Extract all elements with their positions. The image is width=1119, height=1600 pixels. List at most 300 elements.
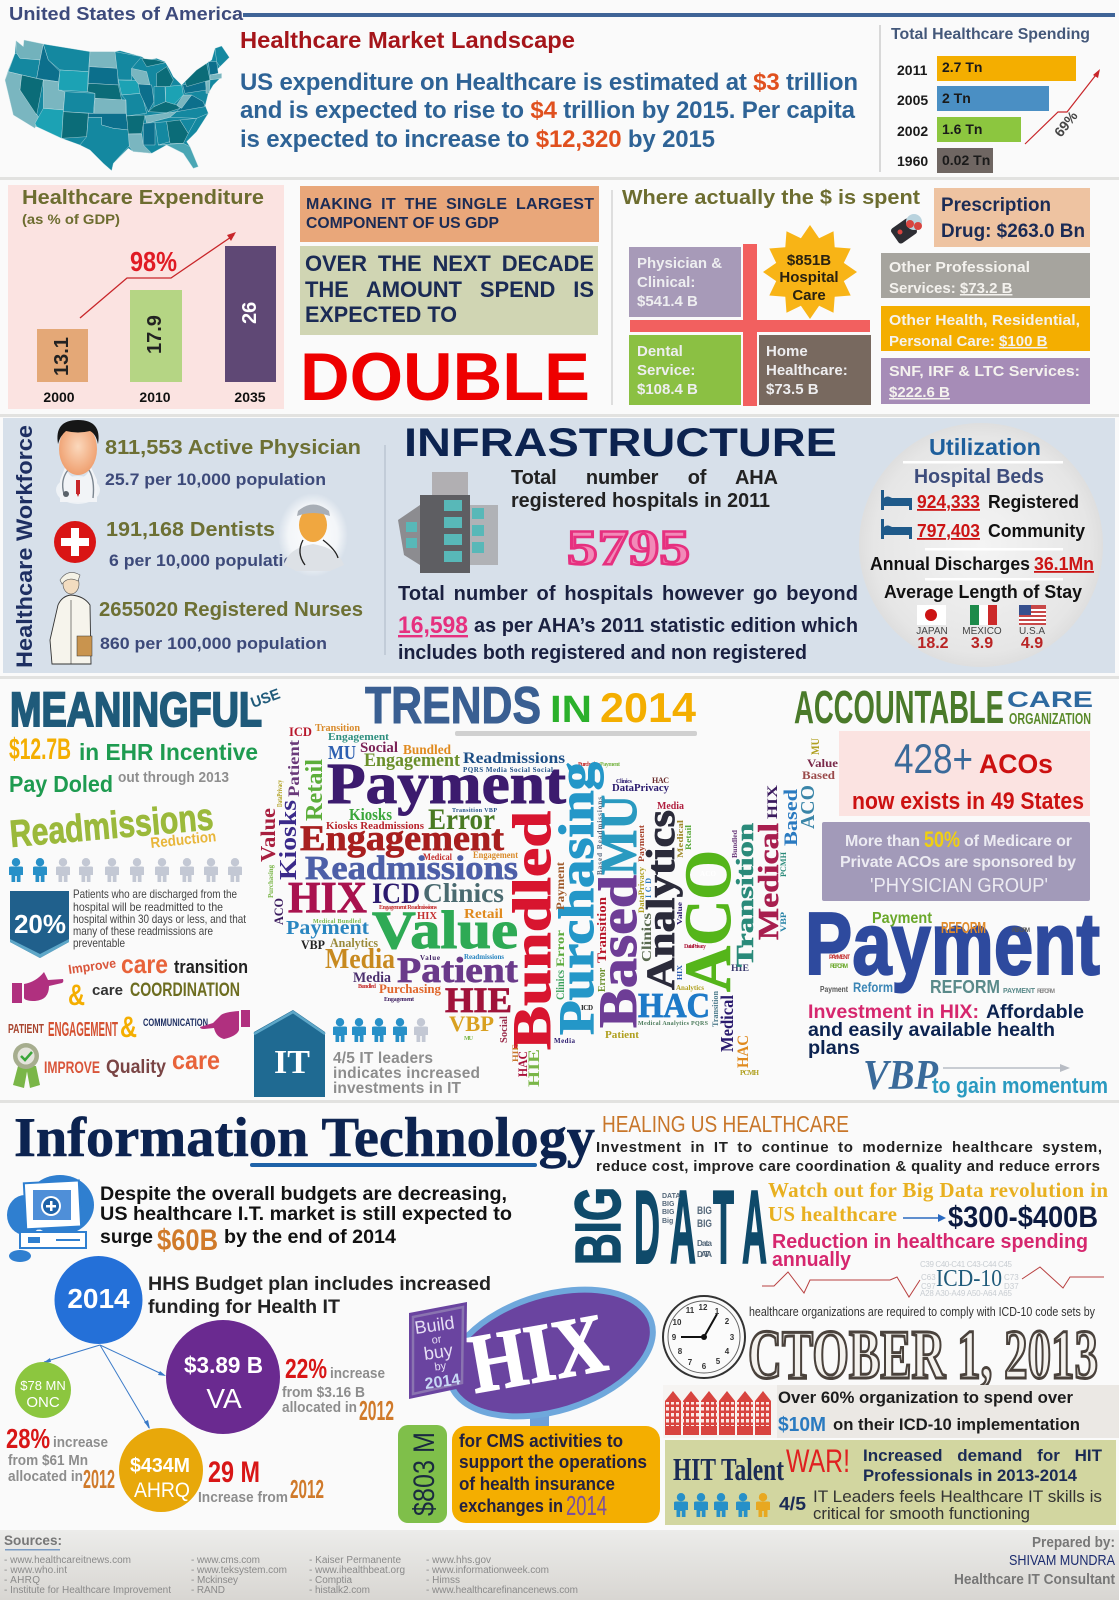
icon: IT house: IT xyxy=(274,1044,310,1081)
panel: CMS activities: of health insurance xyxy=(459,1474,615,1494)
footer: sources and author: - histalk2.com xyxy=(309,1585,370,1596)
word art: payment reform: PAYMENT xyxy=(829,955,850,961)
map of USA xyxy=(5,40,229,171)
footer: sources and author xyxy=(0,1530,1119,1600)
icon: clock: 11 xyxy=(686,1306,695,1315)
word cloud map: Kiosks xyxy=(276,800,302,880)
infrastructure block: registered hospitals in 2011 xyxy=(511,490,770,512)
HIX sign: HIX xyxy=(462,1296,613,1412)
callout: VA increase xyxy=(282,1353,394,1426)
utilization circle: MEXICO xyxy=(962,626,1002,637)
icon: clock xyxy=(663,1296,745,1378)
footer: sources and author: Prepared by: xyxy=(1032,1535,1115,1551)
panel: where the money is spent: Where actually the $ is spent xyxy=(622,187,920,209)
panel: healthcare expenditure: 2010 xyxy=(139,389,171,405)
word cloud map: PCMH xyxy=(740,1069,760,1077)
word cloud map: HIE xyxy=(731,963,749,973)
word cloud map xyxy=(256,723,839,1087)
accountable care organization column xyxy=(794,681,1108,1099)
IT market text: surge xyxy=(100,1226,153,1248)
total healthcare spending bar chart: 2005 xyxy=(897,92,928,108)
investment in HIX text xyxy=(808,1001,1084,1059)
care transition text: Improve xyxy=(67,955,117,977)
panel: where the money is spent: $851B xyxy=(787,252,831,269)
icon: beds xyxy=(881,490,912,539)
word cloud map: HIX xyxy=(676,965,684,980)
HHS budget diagram xyxy=(6,1256,491,1512)
word cloud map: Analytics xyxy=(638,810,683,990)
footer: sources and author: - Comptia xyxy=(309,1575,352,1586)
footer: sources and author: - Himss xyxy=(426,1575,460,1586)
HHS budget diagram: HHS Budget plan includes increased xyxy=(148,1273,491,1295)
footer: sources and author: - Kaiser Permanente xyxy=(309,1555,401,1566)
word art: payment reform: Reform xyxy=(853,979,893,995)
infrastructure block: includes both registered and non registered xyxy=(398,642,807,664)
readmission description: preventable xyxy=(73,936,125,950)
word cloud map: Media xyxy=(325,944,395,975)
word cloud map: Transition xyxy=(733,823,759,967)
panel: where the money is spent: Prescription xyxy=(941,195,1051,216)
footer: sources and author: - www.healthcarefinancenews.com xyxy=(426,1585,578,1596)
sign: build or buy: Build xyxy=(413,1313,456,1338)
care transition text: ENGAGEMENT xyxy=(48,1019,118,1041)
callout: VA increase: 22% xyxy=(285,1353,327,1384)
infrastructure block: as per AHA’s 2011 statistic edition which xyxy=(474,615,858,637)
word cloud map: Purchasing xyxy=(379,981,441,996)
panel: physician group xyxy=(822,822,1090,901)
icon: clock: 7 xyxy=(688,1358,693,1367)
IT market text xyxy=(100,1183,512,1257)
healing us healthcare text xyxy=(596,1111,1102,1175)
IT market text: Despite the overall budgets are decreasing, xyxy=(100,1183,507,1205)
word art: big data: BIG xyxy=(562,1187,634,1265)
word cloud map: PQRS Media Social Social xyxy=(463,766,553,774)
IT market text: by the end of 2014 xyxy=(224,1226,396,1248)
word cloud map: MU xyxy=(808,738,822,755)
word cloud map: Clinics xyxy=(640,912,655,962)
word cloud map: Patient xyxy=(605,1030,640,1041)
IT market text: US healthcare I.T. market is still expected to xyxy=(100,1203,512,1225)
word art: payment reform: REFORM xyxy=(830,964,848,970)
infrastructure block: Total number of AHA xyxy=(511,467,778,489)
word art: payment reform: Payment xyxy=(820,985,848,994)
word art: big data: T xyxy=(713,1170,734,1286)
investment in HIX text: and easily available health xyxy=(808,1019,1055,1041)
panel: ICD-10 spend: on their ICD-10 implementation xyxy=(833,1415,1080,1434)
total healthcare spending bar chart: 69% xyxy=(1051,107,1081,140)
healing us healthcare text: HEALING US HEALTHCARE xyxy=(602,1111,849,1137)
word cloud map: Transition xyxy=(315,723,360,734)
big data callout: Watch out for Big Data revolution in xyxy=(768,1178,1108,1202)
panel: healthcare expenditure: 98% xyxy=(130,246,177,277)
word cloud map: Engagement xyxy=(300,818,504,858)
icon: red cross xyxy=(54,521,96,563)
word cloud map: Clinics xyxy=(616,779,633,785)
big data callout: annually xyxy=(772,1248,852,1271)
panel: where the money is spent: Home xyxy=(766,343,808,360)
heading: trends in 2014: TRENDS xyxy=(365,677,541,735)
word art: big data: DATA xyxy=(662,1193,680,1200)
panel: healthcare expenditure: Healthcare Expenditure xyxy=(22,187,264,209)
callout: AHRQ increase: 2012 xyxy=(290,1474,324,1504)
callout: VA increase: from $3.16 B xyxy=(282,1384,365,1401)
callout: AHRQ increase: Increase from xyxy=(198,1489,288,1506)
callout: single largest component xyxy=(300,186,599,242)
callout: single largest component: MAKING IT THE SINGLE LARGEST xyxy=(306,196,594,213)
word cloud map: DataPrivacy xyxy=(276,780,284,807)
panel: where the money is spent: Services: $73.2 B xyxy=(889,280,1013,297)
panel: where the money is spent: Clinical: xyxy=(637,274,695,291)
bubble: VA: $3.89 B xyxy=(184,1352,263,1378)
icon: computer xyxy=(7,1175,94,1262)
utilization circle: Hospital Beds xyxy=(914,466,1044,488)
bubble: AHRQ: AHRQ xyxy=(134,1479,190,1502)
IT leaders block: indicates increased xyxy=(333,1065,480,1082)
icon: clock: 2 xyxy=(725,1317,730,1326)
panel: CMS activities xyxy=(452,1426,660,1523)
big data callout: Reduction in healthcare spending xyxy=(772,1230,1088,1253)
word cloud map: Value xyxy=(676,902,684,925)
panel: ACO count: 428+ xyxy=(894,735,973,782)
footer: sources and author: - www.hhs.gov xyxy=(426,1555,491,1566)
header: country title: United States of America xyxy=(9,4,244,24)
panel: HIT talent war: HIT Talent xyxy=(673,1451,784,1487)
panel: ICD-10 spend: Over 60% organization to spend over xyxy=(778,1388,1073,1407)
heading: trends in 2014 xyxy=(365,677,697,736)
utilization circle: 36.1Mn xyxy=(1034,554,1094,574)
panel: ACO count: now exists in 49 States xyxy=(852,788,1084,815)
icon: quality ribbon xyxy=(13,1043,40,1088)
stat: 5795: 5795 xyxy=(567,519,690,575)
word cloud map: Medical Analytics PQRS xyxy=(638,1021,709,1027)
VBP momentum: VBP xyxy=(863,1053,938,1099)
word cloud map: VBP xyxy=(779,912,788,932)
word cloud map: Analytics xyxy=(676,984,704,992)
readmission description: hospital within 30 days or less, and that xyxy=(73,912,247,926)
heading: meaningful use: USE xyxy=(249,686,283,712)
panel: where the money is spent: SNF, IRF & LTC Services: xyxy=(889,363,1080,380)
readmission description: Patients who are discharged from the xyxy=(73,887,237,901)
word cloud map: Engagement xyxy=(328,731,389,743)
word art: big data: BIG xyxy=(662,1201,675,1208)
panel: CMS activities: exchanges in xyxy=(459,1496,563,1516)
total healthcare spending bar chart: Total Healthcare Spending xyxy=(891,26,1090,43)
ICD-10 ECG graphic xyxy=(762,1260,1104,1298)
utilization circle: Utilization xyxy=(929,434,1041,460)
callout: next decade: THE AMOUNT SPEND IS xyxy=(305,277,594,302)
ICD-10 ECG graphic: C63 xyxy=(921,1273,936,1282)
icon: physician xyxy=(56,420,100,504)
word art: big data: BIG xyxy=(697,1205,712,1217)
panel: physician group: More than xyxy=(845,833,920,850)
word cloud map: Medical xyxy=(423,852,452,862)
word cloud map: Transition xyxy=(711,990,720,1027)
word cloud map: Transition xyxy=(594,896,609,963)
care transition text: care xyxy=(121,949,168,979)
word cloud map: HAC xyxy=(652,776,669,785)
panel: HIT talent war: critical for smooth functioning xyxy=(813,1505,1030,1523)
heading: meaningful use: MEANINGFUL xyxy=(10,684,262,737)
utilization circle: JAPAN xyxy=(916,626,948,637)
word cloud map: Value xyxy=(256,808,280,862)
icon: flags xyxy=(917,605,1046,625)
callout: VA increase: allocated in xyxy=(282,1399,357,1416)
pictogram: 4 of 5 IT leaders xyxy=(333,1018,428,1042)
word cloud map: Purchasing xyxy=(267,865,275,898)
icon: pills xyxy=(890,214,922,245)
improve quality care text: Quality xyxy=(106,1057,166,1078)
word cloud map: Based Readmissions xyxy=(596,797,604,875)
sign: build or buy xyxy=(409,1302,467,1399)
panel: where the money is spent: Drug: $263.0 Bn xyxy=(941,221,1085,242)
word art: big data: D xyxy=(634,1170,660,1286)
word cloud map: Social xyxy=(498,1016,510,1043)
panel: healthcare expenditure: 26 xyxy=(239,302,261,324)
callout: single largest component: COMPONENT OF US GDP xyxy=(306,215,499,232)
word art: big data xyxy=(562,1170,767,1286)
word cloud map: Analytics xyxy=(330,935,378,950)
word art: payment reform: REFORM xyxy=(1012,928,1030,934)
IT leaders block: 4/5 IT leaders xyxy=(333,1050,433,1067)
word cloud map: Engagement Readmissions xyxy=(379,905,438,911)
icon: clock: 5 xyxy=(716,1357,721,1366)
word cloud map: DataPrivacy xyxy=(684,944,706,950)
word cloud map: Kiosks xyxy=(349,805,392,824)
panel: physician group: 50% xyxy=(924,827,960,852)
word cloud map: VBP xyxy=(301,937,325,952)
word cloud map: HIX xyxy=(288,873,367,922)
word cloud map: ICD xyxy=(372,877,420,910)
footer: sources and author: - RAND xyxy=(191,1585,225,1596)
callout: next decade: OVER THE NEXT DECADE xyxy=(305,251,594,276)
icon: clock: 10 xyxy=(673,1318,682,1327)
investment in HIX text: plans xyxy=(808,1037,860,1059)
word cloud map: HIE xyxy=(511,1044,520,1062)
infrastructure block: Total number of hospitals however go beyond xyxy=(398,583,858,605)
word art: big data: BIG xyxy=(697,1218,712,1230)
heading: infrastructure: INFRASTRUCTURE xyxy=(404,421,837,465)
infrastructure block: 16,598 xyxy=(398,612,468,639)
word art: big data: BIG xyxy=(662,1209,675,1216)
callout: ONC increase: allocated in xyxy=(8,1468,83,1485)
panel: where the money is spent: Personal Care: $100 B xyxy=(889,333,1048,350)
panel: where the money is spent xyxy=(612,187,1090,406)
panel: healthcare expenditure: 2035 xyxy=(234,389,266,405)
word cloud map: ACO xyxy=(700,870,717,878)
callout: ONC increase: increase xyxy=(53,1434,108,1451)
icon: clock: 6 xyxy=(702,1362,707,1371)
word cloud map: Medical xyxy=(717,995,737,1052)
utilization circle: Registered xyxy=(988,492,1079,512)
word cloud map: Retail xyxy=(302,759,328,821)
icon: clock: 1 xyxy=(715,1307,720,1316)
badge: $803 M xyxy=(398,1425,447,1523)
workforce block: 860 per 100,000 population xyxy=(100,634,327,653)
workforce block xyxy=(50,420,363,664)
word cloud map: HAC xyxy=(735,1035,752,1068)
callout: AHRQ increase: 29 M xyxy=(208,1456,260,1489)
care transition text: transition xyxy=(174,957,248,977)
utilization circle: U.S.A xyxy=(1019,626,1045,637)
panel: HIT talent war xyxy=(665,1440,1116,1525)
panel: healthcare expenditure xyxy=(8,185,284,409)
utilization circle: Community xyxy=(988,521,1085,541)
icon: clock: 4 xyxy=(725,1347,730,1356)
care transition text: COMMUNICATION xyxy=(143,1017,208,1029)
sign: build or buy: buy xyxy=(423,1340,454,1364)
word cloud map: MU xyxy=(464,1036,474,1042)
panel: where the money is spent: $108.4 B xyxy=(637,381,698,398)
pictogram: readmission people xyxy=(9,858,242,882)
header: country title xyxy=(9,4,1115,24)
badge: 20%: 20% xyxy=(14,909,66,939)
bubble: ONC xyxy=(15,1362,71,1418)
word cloud map: Patient xyxy=(286,739,303,797)
bubble: ONC: ONC xyxy=(26,1394,60,1411)
word art: payment reform: REFORM xyxy=(1037,989,1055,995)
footer: sources and author: Sources: xyxy=(4,1532,62,1548)
word cloud map: Payment xyxy=(553,862,567,910)
IT market text: $60B xyxy=(157,1224,218,1257)
word cloud map: Bundled xyxy=(403,743,451,758)
improve quality care text: IMPROVE xyxy=(44,1058,100,1077)
word cloud map: Based xyxy=(588,875,648,1028)
heading: trends in 2014: 2014 xyxy=(600,684,697,731)
panel: where the money is spent: $222.6 B xyxy=(889,384,950,401)
panel: where the money is spent: Hospital xyxy=(779,269,839,286)
EHR incentive text: out through 2013 xyxy=(118,770,229,786)
callout: next decade xyxy=(300,246,598,335)
heading: information technology: Information Technology xyxy=(14,1107,595,1169)
word cloud map: Value xyxy=(372,900,518,960)
word cloud map: Payment xyxy=(286,917,369,939)
word cloud map: ICD xyxy=(644,878,653,898)
readmission description: hospital will be readmitted to the xyxy=(73,900,223,914)
footer: sources and author: - Mckinsey xyxy=(191,1575,238,1586)
word cloud map: Retail xyxy=(684,824,693,850)
word cloud map: Value xyxy=(807,756,839,770)
care transition text: COORDINATION xyxy=(130,980,240,1001)
word cloud map: Media xyxy=(657,801,684,812)
word cloud map: Based xyxy=(802,768,835,782)
word cloud map: Error xyxy=(553,929,567,967)
improve quality care text: care xyxy=(172,1045,220,1075)
ICD-10 ECG graphic: D37 xyxy=(1004,1282,1019,1291)
pictogram: 4 of 5 xyxy=(674,1493,770,1517)
total healthcare spending bar chart: 2 Tn xyxy=(942,90,971,106)
word art: payment reform: REFORM xyxy=(941,920,986,937)
panel: HIT talent war: Professionals in 2013-2014 xyxy=(863,1466,1078,1485)
callout: next decade: EXPECTED TO xyxy=(305,302,457,327)
word cloud map: Readmissions xyxy=(463,750,565,767)
word cloud map: VBP xyxy=(449,1011,494,1036)
panel: HIT talent war: WAR! xyxy=(786,1443,850,1479)
icon: clock: 8 xyxy=(678,1347,683,1356)
total healthcare spending bar chart: 1.6 Tn xyxy=(942,121,982,137)
word art: payment reform: Payment xyxy=(872,910,933,927)
bubble: AHRQ xyxy=(119,1428,203,1512)
word cloud map: Readmissions xyxy=(464,953,504,961)
word cloud map: Media xyxy=(353,970,391,986)
word cloud map: DataPrivacy xyxy=(612,782,669,794)
word cloud map: HIX xyxy=(765,785,781,819)
improve quality care text xyxy=(44,1045,220,1078)
panel: physician group: Private ACOs are sponsored by xyxy=(840,854,1076,871)
word cloud map: MU xyxy=(591,795,648,875)
icon: clock: 9 xyxy=(672,1333,677,1342)
healing us healthcare text: reduce cost, improve care coordination & quality and reduce errors xyxy=(596,1158,1100,1175)
total healthcare spending bar chart xyxy=(880,25,1100,173)
panel: physician group: of Medicare or xyxy=(964,833,1072,850)
word cloud map: DataPrivacy xyxy=(637,867,646,913)
word cloud map: Engagement xyxy=(364,750,461,771)
panel: healthcare expenditure: 13.1 xyxy=(51,337,73,376)
word art: big data: Data xyxy=(697,1239,713,1248)
word cloud map: Medical xyxy=(754,823,785,940)
market landscape statement: and is expected to rise to $4 trillion by 2015. Per capita xyxy=(240,97,856,124)
HIX sign xyxy=(409,1267,668,1439)
heading: accountable care organization: CARE xyxy=(1007,687,1093,712)
word cloud map: Purchasing xyxy=(578,762,600,768)
word cloud map: HIX xyxy=(417,911,438,922)
word cloud map: Bundled xyxy=(358,984,377,990)
care transition text: PATIENT xyxy=(8,1021,44,1036)
ICD-10 ECG graphic: C73 xyxy=(1004,1273,1019,1282)
footer: sources and author: - www.informationweek.com xyxy=(426,1565,549,1576)
word cloud map: Transition VBP xyxy=(452,808,497,814)
footer: sources and author: - Institute for Healthcare Improvement xyxy=(4,1585,171,1596)
icon: pointing hand left xyxy=(200,1010,250,1039)
headline: DOUBLE: DOUBLE xyxy=(300,339,590,415)
panel: where the money is spent: Care xyxy=(792,287,826,304)
panel: where the money is spent: Dental xyxy=(637,343,683,360)
ICD-10 ECG graphic: ICD-10 xyxy=(936,1266,1002,1292)
ICD-10 ECG graphic: A28 A30-A49 A50-A64 A65 xyxy=(920,1289,1013,1298)
care transition text xyxy=(8,949,248,1044)
panel: where the money is spent: Healthcare: xyxy=(766,362,848,379)
workforce block: 25.7 per 10,000 population xyxy=(105,470,326,489)
panel: where the money is spent: Other Health, Residential, xyxy=(889,312,1080,329)
infrastructure block xyxy=(385,421,858,664)
callout: VA increase: increase xyxy=(330,1365,385,1382)
callout: AHRQ increase xyxy=(198,1456,324,1506)
total healthcare spending bar chart: 2011 xyxy=(897,62,928,78)
word cloud map: Purchasing xyxy=(548,762,604,1035)
word cloud map: ACO xyxy=(672,850,745,992)
icon: nurse xyxy=(50,572,92,664)
bubble: 2014: 2014 xyxy=(67,1283,130,1314)
word cloud map: Medical Bundled xyxy=(313,919,362,925)
icon: clock: 12 xyxy=(699,1303,708,1312)
panel: HIT talent war: Increased demand for HIT xyxy=(863,1446,1103,1465)
word art: big data: Big xyxy=(662,1218,673,1225)
callout: ONC increase: from $61 Mn xyxy=(8,1452,88,1469)
healing us healthcare text: Investment in IT to continue to modernize healthcare system, xyxy=(596,1139,1102,1156)
panel: infrastructure background xyxy=(3,418,1115,673)
total healthcare spending bar chart: 1960 xyxy=(897,153,928,169)
word cloud map: ACO xyxy=(797,785,819,829)
word cloud map: Readmissions xyxy=(305,850,518,887)
word cloud map: MU xyxy=(328,742,356,764)
panel: ICD-10 spend: $10M xyxy=(778,1414,826,1436)
workforce block: 2655020 Registered Nurses xyxy=(99,599,363,621)
section dividers xyxy=(0,177,1119,1103)
word cloud map: ICD xyxy=(289,724,312,739)
utilization circle: Average Length of Stay xyxy=(884,582,1082,602)
word art: payment reform: PAYMENT xyxy=(1003,988,1036,995)
HHS budget diagram: funding for Health IT xyxy=(148,1296,340,1318)
panel: where the money is spent: Physician & xyxy=(637,255,722,272)
